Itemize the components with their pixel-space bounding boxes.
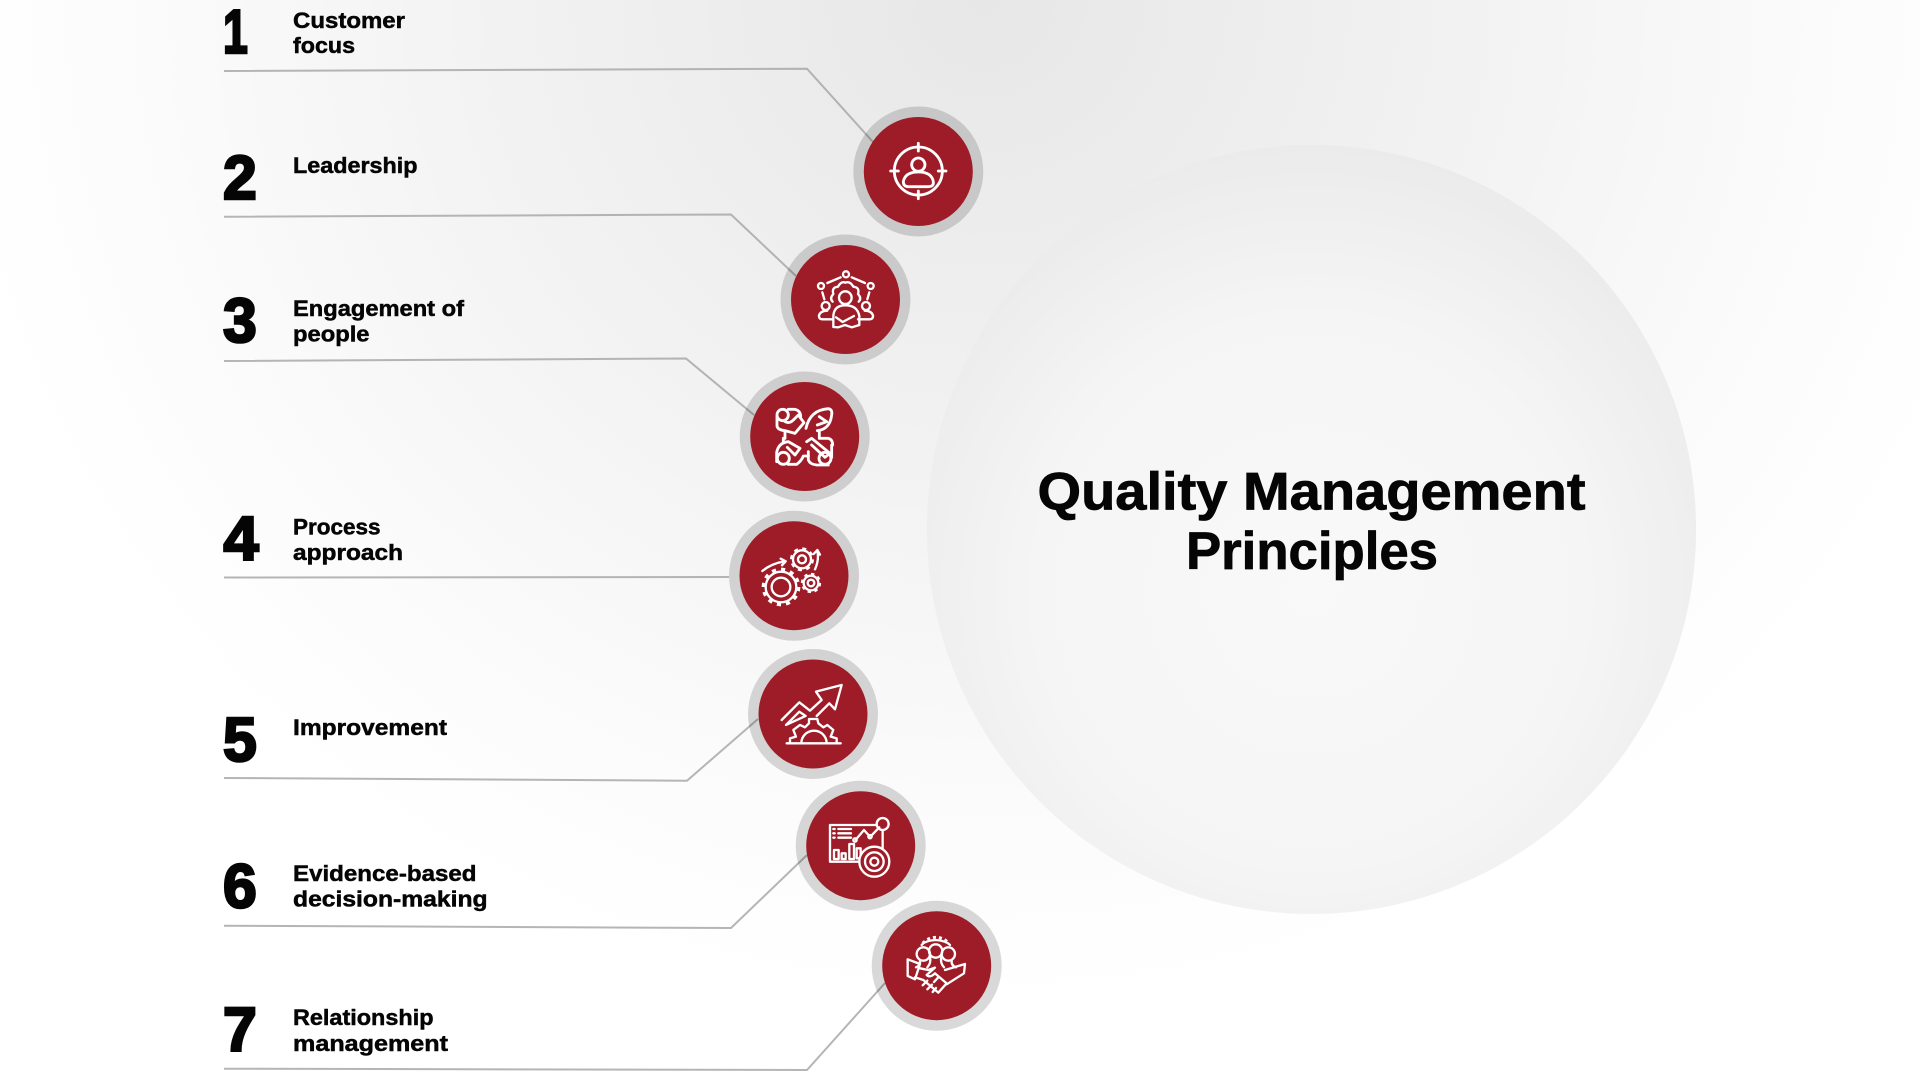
item 6: evidence-based decision-making: Evidence-based	[293, 861, 476, 886]
item 2: leadership: Leadership	[293, 153, 418, 178]
item 3: engagement of people: 3	[223, 286, 257, 356]
item 1: customer focus: Customer	[293, 8, 405, 33]
icon: gears	[762, 549, 820, 604]
item 6: evidence-based decision-making	[223, 781, 926, 928]
central circle with title	[927, 145, 1696, 914]
item 2: leadership: 2	[223, 143, 257, 213]
item 2: leadership	[223, 143, 910, 364]
item 5: improvement: Improvement	[293, 715, 448, 740]
title: Principles	[1186, 522, 1438, 581]
item 3: engagement of people: Engagement of	[293, 296, 465, 321]
item 6: evidence-based decision-making: decision-making	[293, 887, 488, 912]
item 1: customer focus: focus	[293, 33, 355, 58]
item 7: relationship management	[223, 901, 1002, 1070]
icon: handshake with team	[908, 937, 965, 993]
item 4: process approach	[224, 504, 859, 641]
item 3: engagement of people: people	[293, 322, 370, 347]
item 5: improvement	[223, 649, 878, 781]
item 6: evidence-based decision-making: 6	[223, 852, 257, 922]
icon: four joined hands	[777, 409, 833, 465]
item 4: process approach: approach	[293, 540, 403, 565]
item 5: improvement: 5	[223, 705, 257, 775]
icon: rising arrow over gear	[782, 685, 842, 743]
item 7: relationship management: management	[293, 1031, 449, 1056]
item 1: customer focus	[223, 0, 983, 236]
item 7: relationship management: Relationship	[293, 1005, 434, 1030]
icon: analytics dashboard	[830, 818, 889, 877]
item 7: relationship management: 7	[223, 995, 257, 1065]
icon: person in target	[891, 143, 946, 199]
item 4: process approach: Process	[293, 514, 380, 540]
title: Quality Management	[1038, 463, 1586, 522]
icon: leader with team	[818, 271, 874, 327]
item 3: engagement of people	[223, 286, 870, 502]
item 4: process approach: 4	[224, 504, 259, 573]
